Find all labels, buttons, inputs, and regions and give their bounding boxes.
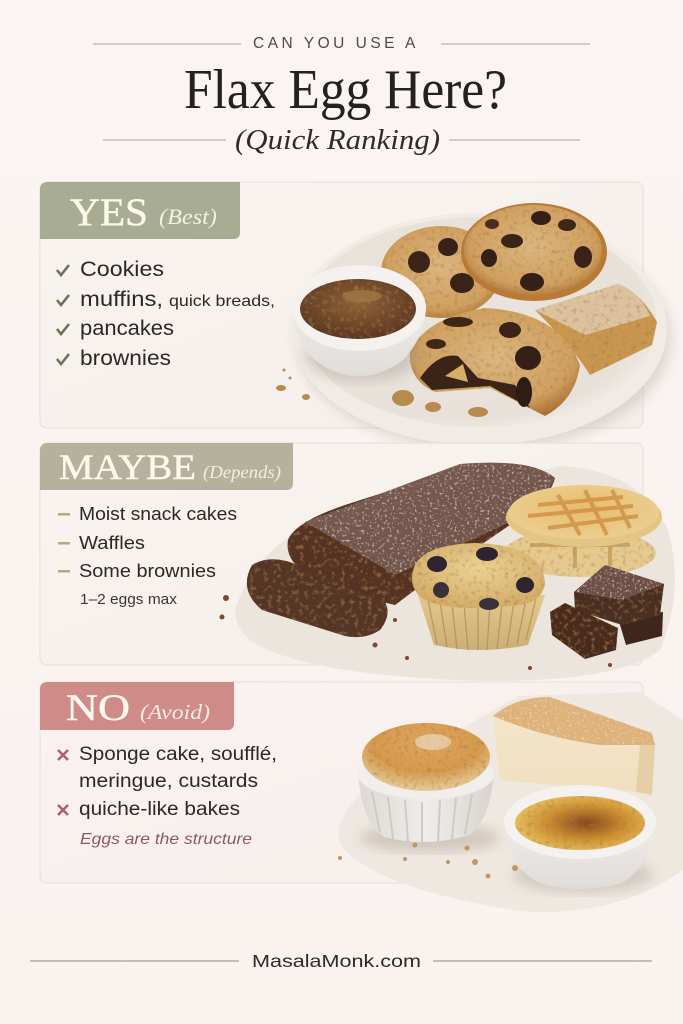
list: no items: [58, 744, 277, 848]
label: yes: (Best): [159, 204, 217, 229]
loaf: [288, 463, 555, 605]
crumbs: [276, 368, 488, 417]
label: no: (Avoid): [140, 700, 210, 724]
crumbs: [220, 595, 612, 670]
check item: muffins: muffins,: [80, 288, 163, 311]
panel card: maybe: [40, 443, 643, 665]
check item: muffins: [57, 288, 275, 311]
bowl of flax gel: [292, 265, 426, 381]
image: loaf, muffin, waffles, brownies: [220, 463, 675, 681]
note: eggs max: 1–2 eggs max: [80, 592, 178, 608]
label: no: [40, 682, 234, 730]
check item: muffins: quick breads,: [169, 293, 275, 310]
cookie: front broken: [410, 308, 580, 416]
label: maybe: MAYBE: [59, 447, 196, 487]
cookie: back left: [381, 226, 501, 318]
footer: MasalaMonk.com: [252, 951, 421, 971]
brownies: [550, 565, 664, 659]
dash item: some brownies: Some brownies: [79, 560, 216, 581]
panel: no: [40, 682, 683, 912]
list: yes items: [57, 258, 275, 370]
cross item: sponge cake: meringue, custards: [79, 771, 258, 792]
title: Flax Egg Here?: [184, 59, 507, 121]
label: maybe: [40, 443, 293, 490]
scone wedge: [535, 284, 657, 375]
label: no: NO: [66, 688, 130, 729]
crumbs: [338, 842, 518, 878]
note: eggs are the structure: Eggs are the structure: [80, 831, 252, 848]
image: souffle, sponge cake, creme brulee: [338, 692, 683, 912]
panel card: no: [40, 682, 643, 883]
list: maybe items: [58, 503, 237, 608]
header: [93, 35, 590, 156]
label: maybe: (Depends): [203, 462, 281, 483]
panel card: yes: [40, 182, 643, 428]
loaf slice: [247, 559, 388, 637]
check item: cookies: Cookies: [80, 258, 164, 281]
check item: pancakes: pancakes: [80, 317, 174, 340]
panel: yes: [40, 182, 672, 451]
subtitle: quick ranking: (Quick Ranking): [235, 124, 440, 156]
label: yes: [40, 182, 240, 239]
creme brulee bowl: [504, 785, 656, 893]
cross item: sponge cake: Sponge cake, soufflé,: [79, 744, 277, 765]
muffin: [412, 543, 545, 650]
sponge cake: [493, 697, 655, 795]
cookie: top right: [461, 203, 607, 301]
cross item: quiche-like bakes: quiche-like bakes: [79, 799, 240, 820]
panel: maybe: [40, 443, 675, 681]
eyebrow: can you use a: CAN YOU USE A: [253, 35, 419, 52]
waffle: top: [506, 485, 662, 547]
souffle ramekin: [358, 723, 500, 852]
waffle: bottom: [504, 529, 656, 577]
dash item: waffles: [58, 532, 145, 553]
dash item: waffles: Waffles: [79, 532, 145, 553]
image: plate of cookies with flax gel: [276, 203, 672, 451]
cross item: sponge cake: [58, 744, 277, 792]
dash item: moist snack cakes: Moist snack cakes: [79, 503, 237, 524]
label: yes: YES: [70, 191, 148, 234]
check item: brownies: brownies: [80, 347, 171, 370]
